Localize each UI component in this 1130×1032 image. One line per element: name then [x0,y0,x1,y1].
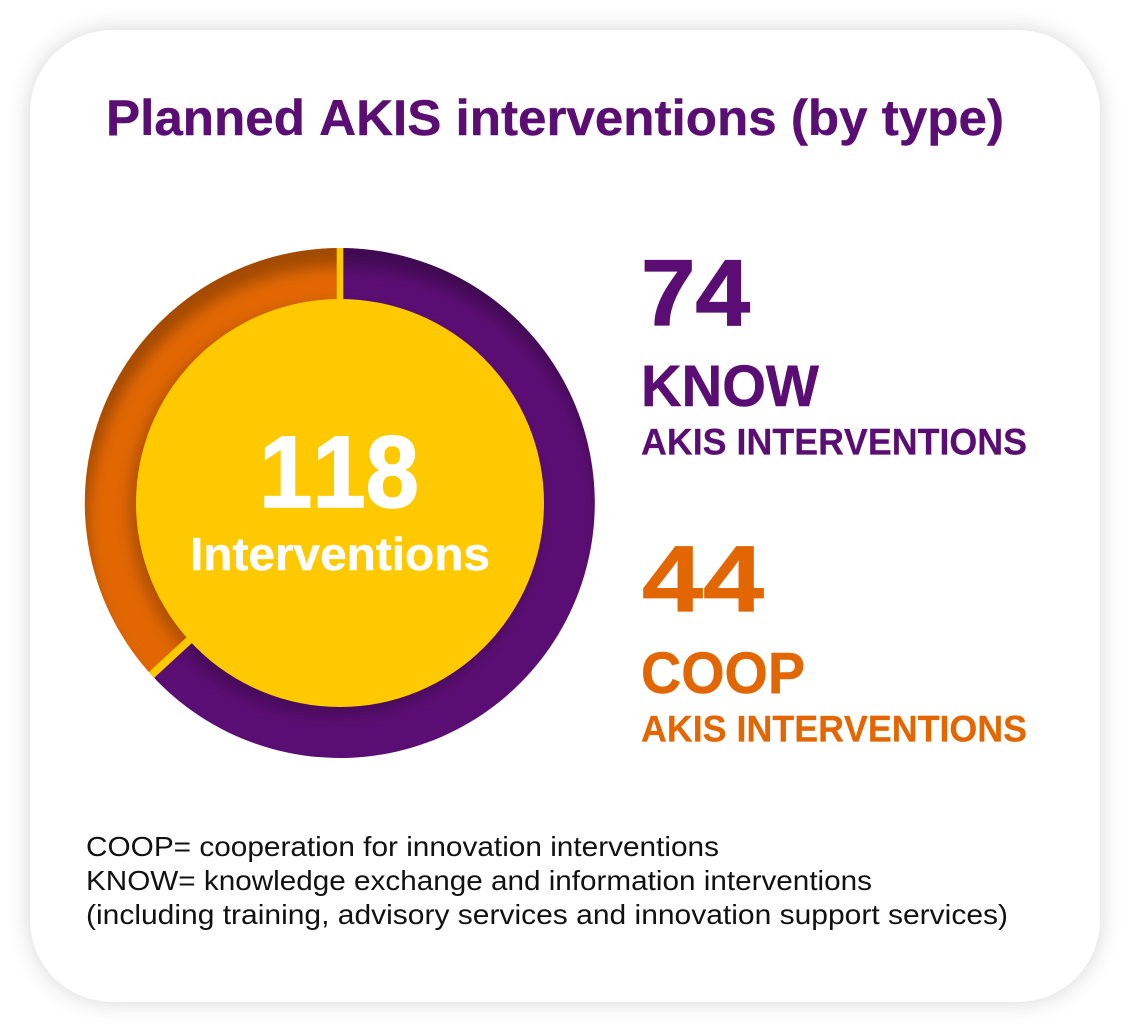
COOP number: 44 [642,526,764,631]
title: Planned AKIS interventions (by type) [106,90,1004,146]
stat: KNOW [641,240,1027,462]
centre label: Interventions [190,528,490,580]
centre disc [136,299,544,707]
stat: COOP [641,526,1027,750]
centre number: 118 [259,415,419,529]
KNOW sublabel: AKIS INTERVENTIONS [641,422,1027,462]
KNOW number: 74 [641,240,750,345]
segment divider top [337,248,343,308]
footnote: COOP= cooperation for innovation interventions [86,831,719,862]
donut chart [84,248,595,758]
footnote: (including training, advisory services and innovation support services) [86,899,1008,930]
COOP sublabel: AKIS INTERVENTIONS [641,708,1027,750]
footnote: KNOW= knowledge exchange and information interventions [86,865,872,896]
segment shading [85,248,595,718]
segment: COOP 44 [85,248,340,675]
segment divider bottom [149,625,205,678]
segment: KNOW 74 [152,248,595,758]
footnote [86,831,1008,930]
COOP label: COOP [641,641,805,706]
KNOW label: KNOW [641,354,819,419]
